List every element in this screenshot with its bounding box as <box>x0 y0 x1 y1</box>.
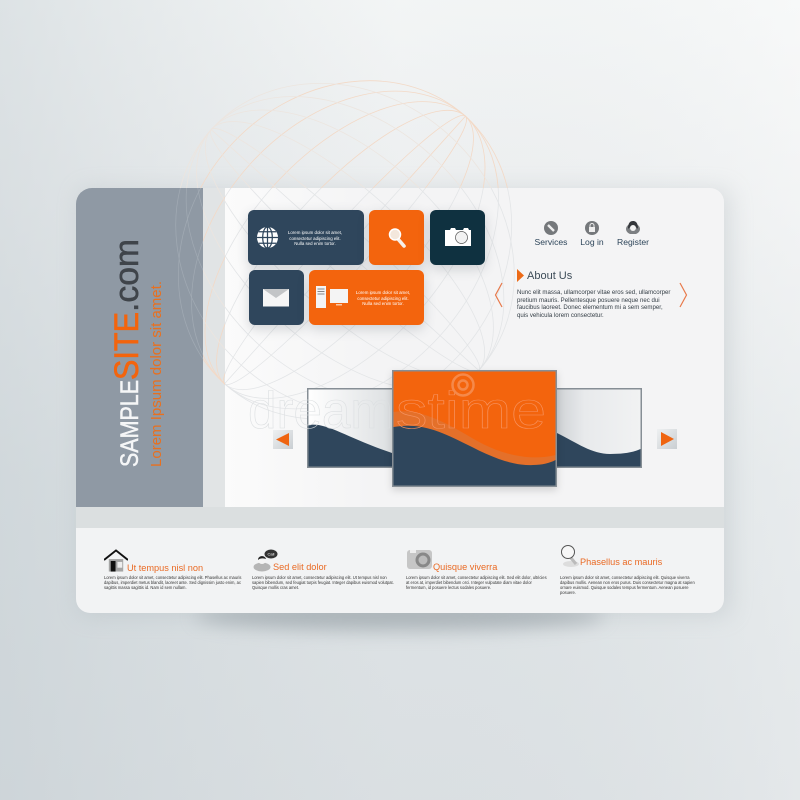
feature text <box>104 575 242 590</box>
icon: lock <box>585 221 599 235</box>
icon: computer <box>316 286 348 308</box>
feature title: Sed elit dolor <box>273 562 327 572</box>
feature text: Lorem ipsum dolor sit amet, consectetur adipiscing elit. Sed elit dolor, ultricies <box>406 575 547 580</box>
body text: pretium mauris. Pellentesque posuere neque nec dui <box>517 297 660 304</box>
sidebar panel <box>76 188 203 507</box>
about us block <box>494 269 688 319</box>
tile text <box>356 290 410 306</box>
feature text: Lorem ipsum dolor sit amet, consectetur adipiscing elit. Quisque viverra <box>560 575 689 580</box>
feature text: posuere. <box>560 590 576 595</box>
feature text: sagittis massa sagittis id. Nam id sem nullam. <box>104 585 187 590</box>
body text: Nunc elit massa, ullamcorper vitae eros sed, ullamcorper <box>517 289 670 296</box>
label: Register <box>617 237 649 247</box>
bottom panel <box>76 528 724 613</box>
icon: house <box>104 549 128 572</box>
tile: globe text <box>248 210 364 265</box>
feature: call <box>252 550 394 590</box>
nav: services <box>534 221 568 247</box>
sidebar title: SAMPLE <box>116 380 144 467</box>
feature text: dapibus, imperdiet metus blandit, laoreet ante. Sed dignissim justo enim, ac <box>104 580 241 585</box>
icon: magnifier <box>388 228 406 248</box>
icon: services <box>544 221 558 235</box>
tile text: Lorem ipsum dolor sit amet, <box>288 230 342 235</box>
tile text: consectetur adipiscing elit. <box>357 296 409 300</box>
sidebar title: .com <box>108 239 146 312</box>
feature: home <box>104 549 242 590</box>
tile: search <box>369 210 424 265</box>
nav: log in <box>580 221 604 247</box>
body text <box>517 289 670 319</box>
feature title: Quisque viverra <box>433 562 497 572</box>
icon: camera <box>407 550 432 569</box>
feature text: dapibus mollis. Aenean non eros purus. Duis consectetur magna at sapien <box>560 580 695 585</box>
watermark: dream <box>248 382 393 440</box>
globe lines over panels <box>176 188 514 419</box>
sidebar title: SITE <box>108 312 146 380</box>
feature title: Phasellus ac mauris <box>580 557 662 567</box>
heading: About Us <box>527 270 572 282</box>
feature text: Quisque mollis cras amet. <box>252 585 299 590</box>
feature text <box>560 575 695 595</box>
slider: side image <box>307 388 642 468</box>
tile: camera <box>430 210 485 265</box>
feature text: Lorem ipsum dolor sit amet, consectetur adipiscing elit. Phasellus ac mauris <box>104 575 241 580</box>
feature text <box>252 575 394 590</box>
body text: quis vehicula lorem consectetur. <box>517 312 604 319</box>
nav: register <box>617 221 649 247</box>
icon: envelope <box>263 289 289 306</box>
feature text: sapien bibendum, sed feugiat turpis feugiat. Integer dapibus euismod volutpat. <box>252 580 394 585</box>
feature text <box>406 575 547 590</box>
feature text: at eros at, imperdiet bibendum orci. Integer vulputate diam vitae dolor <box>406 580 532 585</box>
icon: globe <box>257 227 278 248</box>
label: Log in <box>580 237 604 247</box>
watermark: stime <box>396 382 546 440</box>
feature: search <box>560 545 695 595</box>
label: Services <box>535 237 567 247</box>
tile text: Nulla sed enim tortor. <box>294 241 336 246</box>
arrow: right chevron <box>680 282 688 308</box>
icon: person <box>626 221 640 234</box>
body text: faucibus laoreet. Donec elementum mi a sem semper, <box>517 304 663 311</box>
feature text: Lorem ipsum dolor sit amet, consectetur adipiscing elit. Ut tempus nisl non <box>252 575 387 580</box>
bullet <box>517 269 524 282</box>
icon: camera <box>445 228 471 246</box>
tile: computer text <box>309 270 424 325</box>
arrow: slider previous <box>273 430 293 449</box>
feature text: fermentum, id posuere lectus sodales posuere. <box>406 585 491 590</box>
tile text <box>288 230 342 246</box>
main content panel <box>225 188 724 507</box>
icon: magnifier <box>561 545 579 567</box>
icon: call person <box>254 550 278 572</box>
watermark <box>248 373 546 440</box>
tile text: Nulla sed enim tortor. <box>362 301 404 306</box>
tile: mail <box>249 270 304 325</box>
arrow: left chevron <box>494 282 502 308</box>
feature text: ornare euismod. Quisque sodales tempus fermentum. Aenean posuere <box>560 585 689 590</box>
tile text: Lorem ipsum dolor sit amet, <box>356 290 410 295</box>
slider: main image <box>389 370 560 493</box>
sidebar title <box>108 239 146 467</box>
icon: call person: Call <box>268 552 275 556</box>
sidebar tagline: Lorem Ipsum dolor sit amet. <box>148 281 165 467</box>
tile text: consectetur adipiscing elit. <box>289 236 341 240</box>
feature: camera <box>406 550 547 590</box>
arrow: slider next <box>657 429 677 449</box>
feature title: Ut tempus nisl non <box>127 563 203 573</box>
